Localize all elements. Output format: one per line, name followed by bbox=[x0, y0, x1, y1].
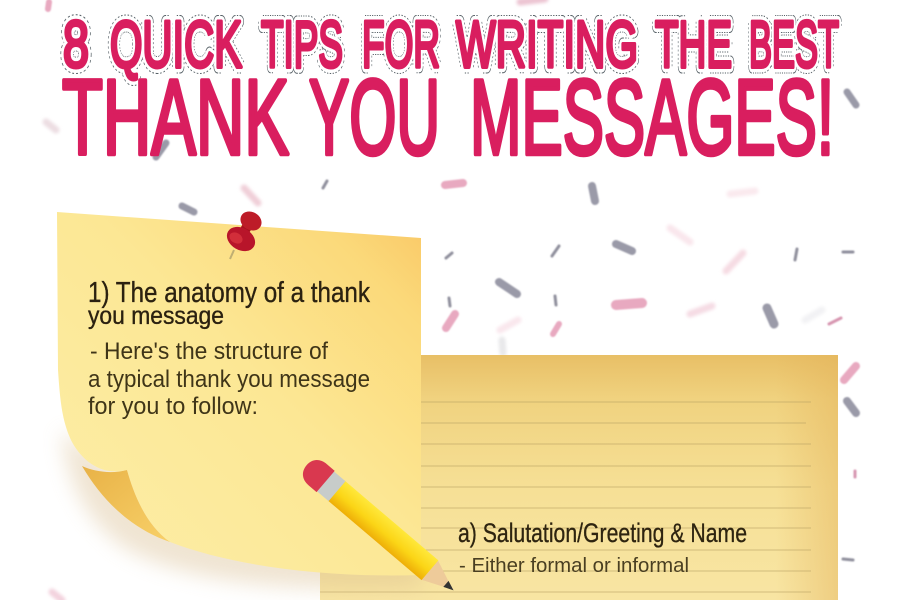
title line 1: dotted sticker text: THE bbox=[655, 7, 732, 81]
note body text bbox=[88, 338, 370, 420]
panel: sticky note bbox=[57, 212, 421, 589]
note heading bbox=[88, 277, 370, 330]
title line 2: YOU bbox=[309, 57, 440, 177]
title line 2 bbox=[62, 57, 834, 177]
title line 1: dotted sticker text: FOR bbox=[362, 7, 440, 81]
note heading: 1) The anatomy of a thank bbox=[88, 277, 370, 309]
title line 1: dotted sticker text: 8 bbox=[63, 7, 89, 81]
title line 1: dotted sticker text: THE bbox=[655, 7, 732, 81]
title line 1: dotted sticker text: 8 bbox=[63, 7, 89, 81]
text: salutation detail: - Either formal or informal bbox=[459, 555, 689, 577]
title line 1: dotted sticker text: WRITING bbox=[456, 7, 638, 81]
note shadow bbox=[62, 430, 421, 589]
note body text: a typical thank you message bbox=[88, 366, 370, 393]
title line 1: dotted sticker text: WRITING bbox=[456, 7, 638, 81]
text: salutation heading: a) Salutation/Greeting & Name bbox=[458, 518, 747, 548]
pencil lead bbox=[443, 581, 456, 593]
panel: lined paper bbox=[320, 355, 838, 600]
title line 1: dotted sticker text: QUICK bbox=[110, 7, 242, 81]
pencil ferrule bbox=[316, 471, 345, 501]
pencil eraser bbox=[298, 455, 335, 492]
title line 1: dotted sticker text: TIPS bbox=[261, 7, 343, 81]
title line 1: dotted sticker text: 8 bbox=[63, 7, 89, 81]
title line 1: dotted sticker text: FOR bbox=[362, 7, 440, 81]
note curled corner bbox=[82, 466, 170, 542]
note body bbox=[57, 212, 421, 575]
note body text: - Here's the structure of bbox=[90, 338, 328, 365]
title line 1: dotted sticker text: TIPS bbox=[261, 7, 343, 81]
note body text: for you to follow: bbox=[88, 393, 258, 420]
title bbox=[62, 7, 839, 177]
title line 1: dotted sticker text: THE bbox=[655, 7, 732, 81]
icon: pencil bbox=[298, 455, 463, 600]
note heading: you message bbox=[88, 302, 224, 330]
title line 1: dotted sticker text: TIPS bbox=[261, 7, 343, 81]
title line 1: dotted sticker text bbox=[63, 7, 839, 81]
title line 2: THANK bbox=[62, 57, 289, 177]
pencil body bbox=[328, 481, 438, 580]
title line 1: dotted sticker text: QUICK bbox=[110, 7, 242, 81]
title line 1: dotted sticker text: QUICK bbox=[110, 7, 242, 81]
title line 1: dotted sticker text: WRITING bbox=[456, 7, 638, 81]
title line 1: dotted sticker text: FOR bbox=[362, 7, 440, 81]
icon: red push pin bbox=[223, 208, 265, 259]
pencil wood tip bbox=[421, 560, 461, 600]
